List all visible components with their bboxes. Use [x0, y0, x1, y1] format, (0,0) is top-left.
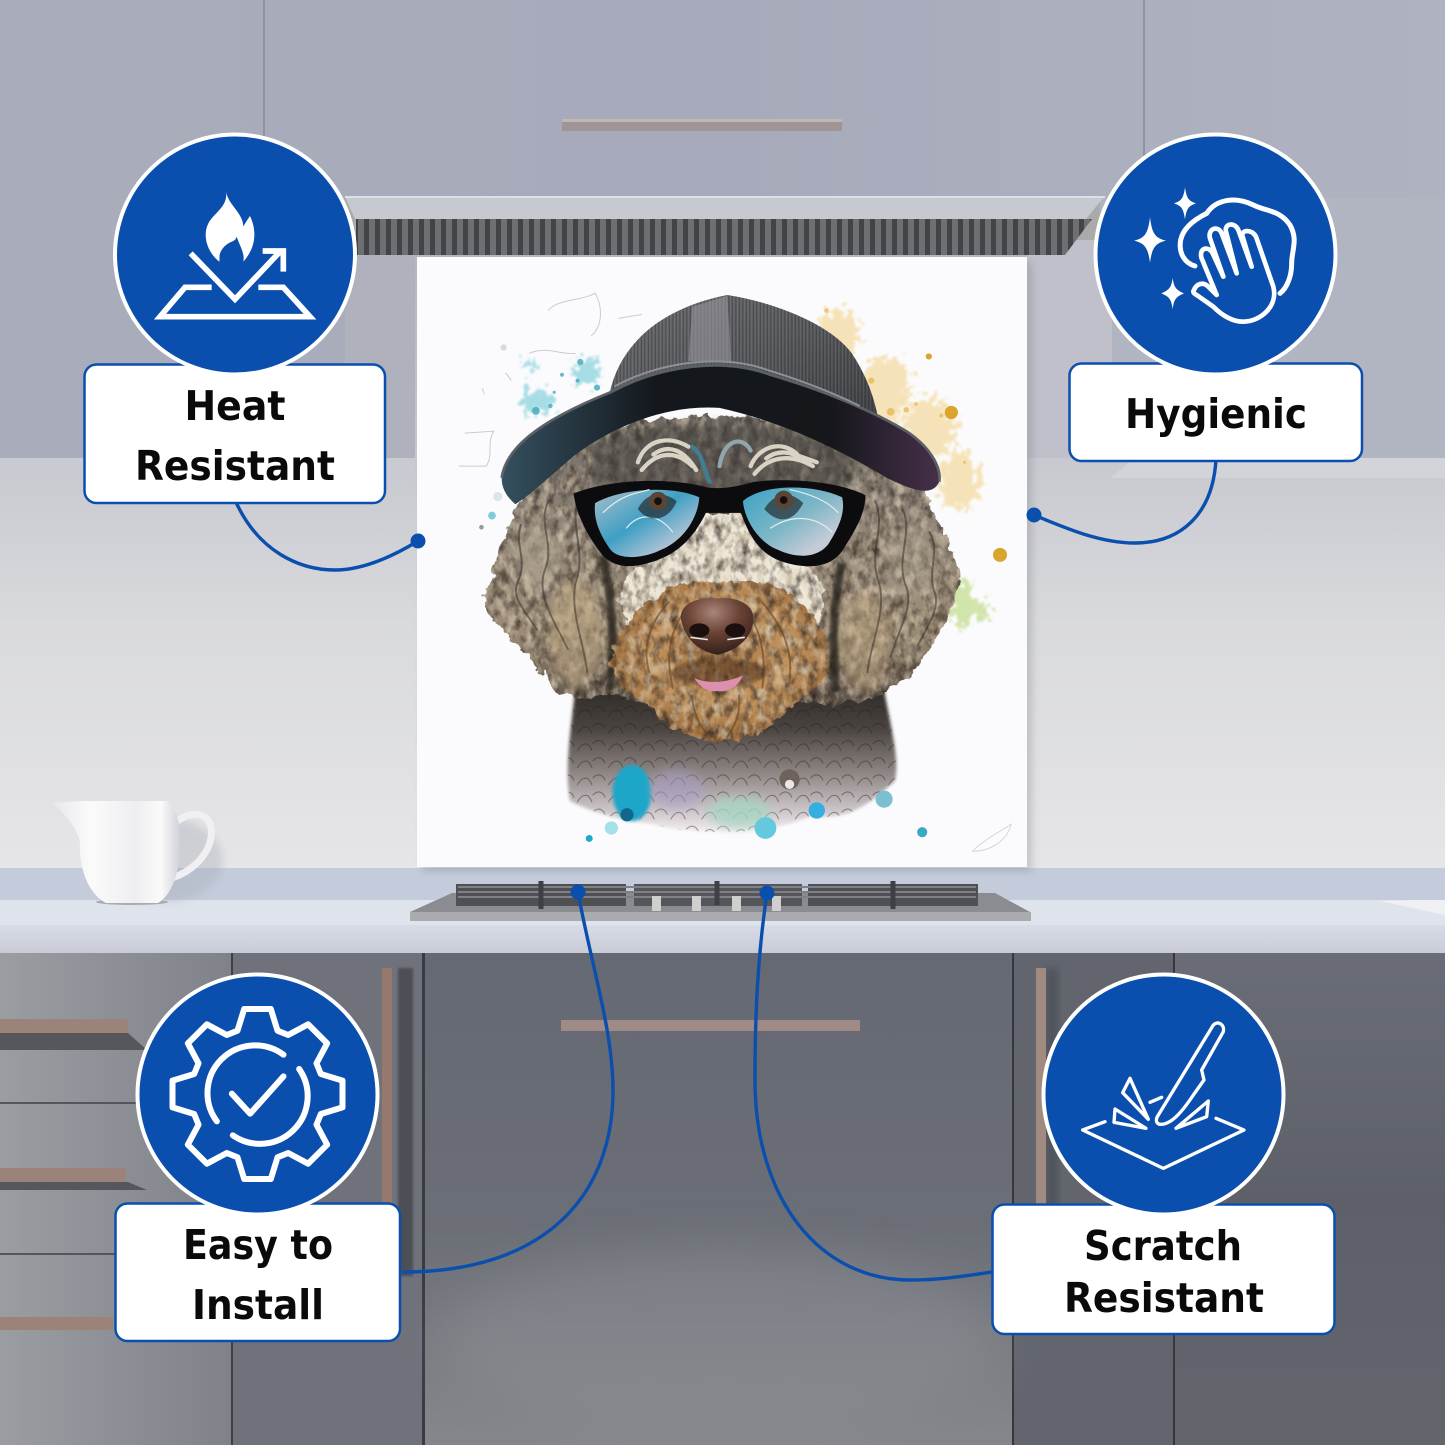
ear hair strands [516, 493, 936, 672]
blue droplets [479, 344, 927, 842]
gold droplets [926, 353, 1007, 562]
icon: gear with check mark [173, 1009, 342, 1179]
splashback panel with dog artwork [417, 257, 1032, 872]
upper cabinets [0, 0, 1445, 478]
bucket hat [502, 295, 940, 504]
icon circle [115, 134, 355, 374]
connector: easy to install [404, 884, 613, 1272]
heading: easy to install: Install [192, 1281, 324, 1329]
lower cabinets [0, 953, 1445, 1445]
green paint splash [948, 577, 988, 628]
label box [1070, 364, 1362, 461]
pale muzzle top [620, 513, 824, 633]
icon: flame with reflected arrow on surface [160, 192, 310, 317]
icon circle [138, 974, 378, 1214]
feature: easy to install [116, 974, 400, 1341]
teal paint splash [521, 356, 600, 414]
brown muzzle and beard [611, 581, 830, 741]
heading: easy to install: Easy to [183, 1221, 333, 1269]
heading: heat resistant: Heat [184, 382, 286, 430]
heading: hygienic: Hygienic [1125, 390, 1307, 438]
icon circle [1044, 974, 1284, 1214]
label box [992, 1204, 1334, 1334]
connector: hygienic [1026, 459, 1216, 543]
heading: heat resistant: Resistant [135, 442, 335, 490]
white forehead and brow curls [638, 440, 817, 482]
upper cabinet handle [562, 119, 842, 131]
heading: scratch resistant: Resistant [1064, 1274, 1264, 1322]
connector: heat resistant [235, 500, 426, 570]
extractor hood [345, 196, 1105, 255]
ear seams [603, 556, 842, 692]
yellow flecks [824, 308, 966, 464]
heading: scratch resistant: Scratch [1084, 1222, 1242, 1270]
gas cooktop [410, 881, 1031, 921]
dog illustration [459, 293, 1011, 851]
tiled wall [0, 255, 1445, 875]
connector: scratch resistant [755, 886, 992, 1280]
muzzle hair strands [647, 602, 790, 737]
label box [116, 1204, 400, 1341]
mouth and tongue [694, 675, 743, 691]
countertop [0, 868, 1445, 953]
feature: hygienic [1070, 134, 1362, 461]
artist signature [972, 824, 1011, 851]
yellow paint splash [817, 309, 980, 511]
heading: heat resistant [135, 382, 335, 490]
teapot [52, 801, 223, 905]
feature: heat resistant [84, 134, 385, 503]
teal flecks [532, 359, 600, 415]
heading: scratch resistant [1064, 1222, 1264, 1322]
chest fur [568, 684, 896, 832]
heading: easy to install [183, 1221, 333, 1329]
sketch doodle lines [459, 293, 642, 466]
label box [84, 364, 385, 503]
ear highlights [550, 579, 601, 688]
glasses [574, 480, 865, 566]
icon circle [1096, 134, 1336, 374]
dark head shading [591, 424, 856, 532]
cabinet handles [0, 968, 1058, 1330]
curly fur mass: ears and head [484, 416, 959, 704]
nose [681, 598, 753, 655]
icon: hand wiping with sparkles [1134, 187, 1294, 322]
feature: scratch resistant [992, 974, 1334, 1334]
icon: knife scratching a surface [1083, 1023, 1244, 1168]
